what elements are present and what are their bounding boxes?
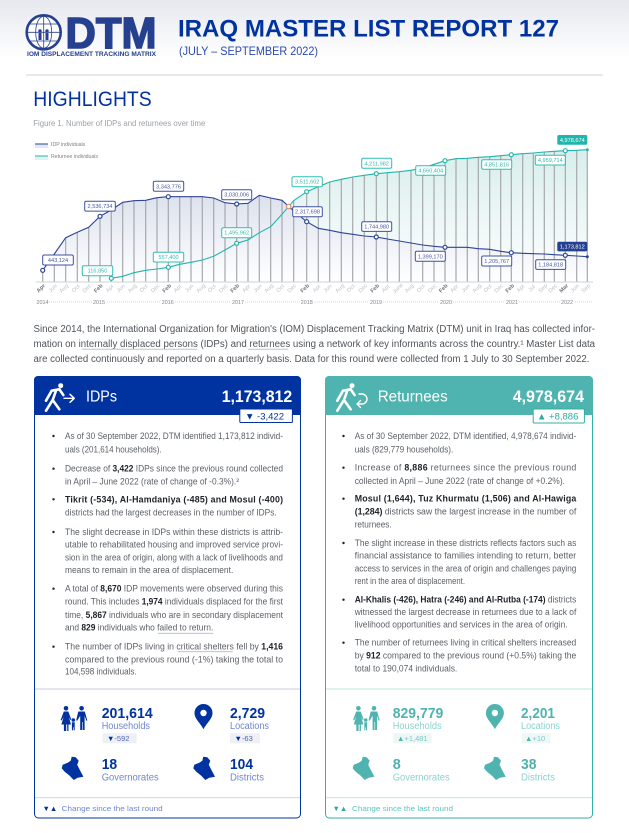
- x axis month labels: Dec: [287, 283, 298, 294]
- x axis month labels: Aug: [264, 283, 275, 294]
- stat: locations: ▲+10: [525, 734, 545, 743]
- panel header: IDPs: [34, 376, 301, 422]
- x axis month labels: Dec: [218, 283, 230, 294]
- stat: districts: Districts: [521, 773, 555, 784]
- DTM wordmark: DTM: [66, 9, 156, 58]
- bullet: reasons: [52, 527, 283, 575]
- IDP bullet list: [52, 431, 284, 676]
- x axis years: 2016: [162, 300, 174, 306]
- heading: highlights: HIGHLIGHTS: [33, 88, 152, 111]
- bullet: largest decreases: [342, 595, 577, 630]
- x axis month labels: Oct: [416, 283, 427, 294]
- bullet: largest decreases: [52, 494, 283, 518]
- x axis month labels: Feb: [162, 283, 173, 294]
- bullet: increase: Increase of 8,886 returnees since the previous round: [355, 463, 576, 473]
- bullet: identified IDPs: [52, 431, 283, 455]
- x axis years: 2015: [93, 300, 105, 306]
- x axis month labels: Aug: [127, 283, 138, 294]
- callouts: returnee values: 116,850: [88, 269, 107, 275]
- stat: locations: 2,729: [230, 705, 265, 722]
- x axis years: 2021: [506, 300, 518, 306]
- stat: households: 829,779: [393, 705, 443, 722]
- bullet: reasons: access to services in the area of origin and challenges paying: [355, 563, 576, 573]
- callouts: returnee values: [82, 135, 587, 276]
- subtitle: period: (JULY – SEPTEMBER 2022): [179, 44, 318, 58]
- icon: IOM globe: [27, 15, 61, 49]
- x axis month labels: Sep: [581, 283, 592, 294]
- x axis month labels: Feb: [230, 283, 241, 294]
- icon: family: [353, 706, 380, 731]
- x axis month labels: Oct: [346, 283, 357, 294]
- label: IDPs: IDPs: [86, 389, 117, 406]
- x axis month labels: Apr: [381, 284, 392, 294]
- stat: households: [353, 705, 443, 743]
- icon: person moving with arrow: [46, 383, 74, 411]
- bullet: identified returnees: [342, 431, 576, 455]
- bullet: identified returnees: As of 30 September 2022, DTM identified, 4,978,674 individ-: [355, 431, 576, 441]
- x axis month labels: Dec: [150, 283, 162, 294]
- stat: households: ▲+1,481: [397, 734, 428, 743]
- bullet: reasons: [342, 538, 577, 586]
- stat: governorates: 8: [393, 756, 401, 773]
- bullet: reasons: means to remain in the area of displacement.: [65, 565, 233, 575]
- panel header: returnees: [325, 376, 593, 423]
- x axis month labels: Jun: [116, 283, 127, 294]
- bullet: identified returnees: uals (829,779 households).: [355, 445, 453, 455]
- x axis years: [36, 298, 593, 306]
- returnee line: [111, 150, 587, 278]
- bullet: critical shelters: compared to the previous round (-1%) taking the total to: [65, 654, 283, 664]
- callouts: IDP values: 443,124: [48, 258, 68, 264]
- callouts: IDP values: 1,173,812: [560, 245, 585, 251]
- icon: family: [61, 706, 87, 731]
- stat: districts: 104: [230, 756, 254, 773]
- x axis month labels: Aug: [472, 283, 483, 294]
- icon: map of Iraq: [353, 757, 374, 780]
- callouts: IDP values: [43, 181, 587, 269]
- callouts: IDP values: 2,536,734: [88, 204, 112, 210]
- bullet: movements: A total of 8,670 IDP movements were observed during this: [65, 584, 284, 594]
- bullet: movements: and 829 individuals who failed to return.: [65, 623, 213, 633]
- bullet: largest increases: Mosul (1,644), Tuz Khurmatu (1,506) and Al-Hawiga: [355, 494, 576, 504]
- x axis month labels: Jul: [528, 284, 537, 293]
- bullet: largest increases: [342, 494, 577, 530]
- x axis years: 2017: [232, 300, 244, 306]
- callouts: returnee values: 4,959,714: [538, 158, 563, 164]
- x axis month labels: Oct: [483, 283, 494, 294]
- x axis month labels: Aug: [59, 283, 70, 294]
- bullet: largest increases: (1,284) districts saw the largest increase in the number of: [355, 507, 577, 517]
- stat: households: ▼-592: [107, 734, 129, 743]
- returnee area: [111, 150, 587, 282]
- stat: districts: Districts: [230, 773, 264, 784]
- stat: households: Households: [393, 721, 442, 732]
- badge: returnee change: ▲ +8,886: [537, 412, 578, 422]
- bullet: reasons: financial assistance to families intending to return, better: [355, 550, 576, 560]
- x axis month labels: Dec: [427, 283, 439, 294]
- stat: districts: 38: [521, 756, 536, 773]
- x axis month labels: Oct: [139, 283, 150, 294]
- badge: returnee change: [533, 409, 584, 423]
- bullet: decrease: [52, 464, 283, 487]
- bullet: identified IDPs: uals (201,614 households).: [65, 445, 162, 455]
- stat: locations: Locations: [521, 721, 560, 732]
- x axis month labels: Apr: [516, 284, 527, 294]
- IDP line: [43, 195, 587, 270]
- x axis month labels: Mar: [559, 283, 571, 294]
- bullet: decrease: in April – June 2022 (rate of change of -0.3%).²: [65, 477, 239, 487]
- legend: change since last round: Change since the last round: [352, 804, 453, 813]
- IDP area: [43, 195, 587, 282]
- chart legend: Returnee individuals: [51, 154, 98, 160]
- bullet: decrease: Decrease of 3,422 IDPs since the previous round collected: [65, 464, 283, 474]
- stat: governorates: Governorates: [102, 773, 159, 784]
- x axis month labels: Oct: [207, 283, 218, 294]
- x axis month labels: [36, 282, 592, 295]
- x axis month labels: Aug: [404, 283, 415, 294]
- x axis month labels: Feb: [505, 283, 516, 294]
- callouts: returnee values: 3,511,602: [295, 180, 319, 186]
- legend: change since last round: ▼▲: [332, 804, 347, 813]
- bullet: identified IDPs: As of 30 September 2022, DTM identified 1,173,812 individ-: [65, 431, 283, 441]
- x axis month labels: Feb: [300, 283, 311, 294]
- callouts: returnee values: 557,400: [158, 255, 179, 261]
- x axis month labels: Apr: [105, 284, 116, 294]
- x axis month labels: Feb: [438, 283, 450, 294]
- x axis month labels: Dec: [494, 283, 505, 294]
- intro paragraph: are collected continuously and reported on a quarterly basis. Data for this round were collected from 1 July to 30 September 2022.: [34, 354, 590, 365]
- x axis month labels: Dec: [82, 283, 93, 294]
- bullet: largest increases: returnees.: [355, 520, 392, 530]
- legend: change since last round: Change since the last round: [62, 804, 163, 813]
- x axis years: 2014: [36, 300, 48, 306]
- stat: governorates: [62, 756, 159, 784]
- stat: locations: [194, 704, 269, 743]
- line chart: IDPs and returnees over time: [35, 135, 593, 306]
- x axis month labels: Aug: [196, 283, 207, 294]
- x axis years: 2018: [301, 300, 313, 306]
- icon: location pin: [194, 704, 212, 729]
- intro paragraph: Since 2014, the International Organization for Migration's (IOM) Displacement Tracking Matrix (DTM) unit in Iraq has collected infor-: [34, 324, 595, 335]
- x axis month labels: Sep: [538, 283, 549, 294]
- bullet: reasons: rent in the area of displacement.: [355, 576, 465, 586]
- chart legend: IDP individuals: [51, 142, 86, 148]
- x axis month labels: Jun: [461, 283, 472, 294]
- callouts: returnee values: 4,978,674: [560, 138, 585, 144]
- x axis month labels: Apr: [173, 284, 184, 294]
- x axis month labels: Jun: [48, 283, 59, 294]
- bullet: movements: [52, 584, 284, 633]
- x axis month labels: Oct: [71, 283, 82, 294]
- stat: locations: ▼-63: [234, 734, 253, 743]
- icon: map of Iraq: [484, 757, 506, 780]
- bullet: movements: time, 5,867 individuals who are in secondary displacement: [65, 610, 284, 620]
- x axis month labels: Apr: [312, 284, 323, 294]
- bullet: critical shelters: 104,598 individuals.: [65, 666, 137, 676]
- bullet: reasons: The slight decrease in IDPs within these districts is attrib-: [65, 527, 283, 537]
- data markers: [41, 148, 589, 280]
- panel: IDPs: [34, 376, 301, 818]
- x axis month labels: Jun: [253, 283, 264, 294]
- bullet: reasons: The slight increase in these districts reflects factors such as: [355, 538, 577, 548]
- stat: locations: 2,201: [521, 705, 555, 722]
- x axis years: 2022: [561, 300, 573, 306]
- callouts: IDP values: 1,184,818: [538, 263, 563, 269]
- figure caption: Figure 1. Number of IDPs and returnees over time: [33, 119, 206, 128]
- logo: IOM DTM: [27, 9, 157, 58]
- callouts: IDP values: 3,030,006: [224, 193, 249, 199]
- x axis month labels: Apr: [36, 283, 47, 294]
- stat: households: [61, 705, 153, 743]
- x axis month labels: Apr: [450, 284, 460, 294]
- stat: locations: [486, 704, 560, 743]
- bullet: critical shelters: The number of IDPs living in critical shelters fell by 1,416: [65, 642, 283, 652]
- callouts: IDP values: 2,317,698: [295, 210, 320, 216]
- panel: returnees: [325, 376, 593, 818]
- x axis month labels: Aug: [335, 283, 346, 294]
- bullet: critical shelters: by 912 compared to the previous round (+0.5%) taking the: [355, 651, 576, 661]
- bullet: largest decreases: districts had the largest decreases in the number of IDPs.: [65, 508, 277, 518]
- callouts: returnee values: 4,211,982: [364, 161, 389, 167]
- bullet: critical shelters: total to 190,074 individuals.: [355, 663, 457, 673]
- x axis month labels: Feb: [93, 283, 105, 294]
- callouts: IDP values: 1,744,980: [364, 225, 389, 231]
- bullet: critical shelters: The number of returnees living in critical shelters increased: [355, 638, 576, 648]
- icon: person returning with arrow: [337, 383, 367, 411]
- callouts: returnee values: 4,660,404: [418, 169, 443, 175]
- total: returnees: 4,978,674: [513, 388, 585, 406]
- icon: map of Iraq: [62, 757, 83, 780]
- icon: location pin: [486, 704, 504, 729]
- x axis years: 2020: [440, 300, 452, 306]
- chart legend: [35, 142, 98, 160]
- callouts: IDP values: 1,205,767: [484, 259, 509, 265]
- icon: map of Iraq: [193, 757, 215, 780]
- bullet: reasons: sion in the area of origin, along with a lack of livelihoods and: [65, 553, 283, 563]
- x axis years: 2019: [370, 300, 382, 306]
- x axis month labels: Jun: [184, 283, 195, 294]
- stat: governorates: Governorates: [393, 773, 450, 784]
- x axis month labels: June: [392, 282, 405, 295]
- stat: governorates: [353, 756, 450, 784]
- intro paragraph: mation on internally displaced persons (IDPs) and returnees using a network of key informants across the country.¹ Master List data: [34, 339, 595, 350]
- x axis month labels: Jun: [570, 283, 581, 294]
- bullet: critical shelters: [342, 638, 576, 673]
- legend: change since last round: ▼▲: [42, 804, 57, 813]
- x axis month labels: Feb: [370, 283, 381, 294]
- bullet: reasons: utable to rehabilitated housing and improved service provi-: [65, 540, 283, 550]
- badge: IDP change: ▼ -3,422: [245, 411, 284, 422]
- bullet: largest decreases: Tikrit (-534), Al-Hamdaniya (-485) and Mosul (-400): [65, 494, 283, 504]
- callouts: IDP values: 1,399,170: [418, 254, 443, 260]
- x axis month labels: Oct: [276, 283, 286, 294]
- callouts: IDP values: 3,343,776: [156, 184, 181, 190]
- stat: households: 201,614: [102, 705, 153, 722]
- bullet: largest decreases: witnessed the largest decrease in returnees due to a lack of: [354, 607, 577, 617]
- bullet: largest decreases: Al-Khalis (-426), Hatra (-246) and Al-Rutba (-174) districts: [355, 595, 577, 605]
- label: returnees: Returnees: [378, 389, 448, 406]
- badge: IDP change: [240, 409, 292, 422]
- bullet: increase: [342, 463, 576, 486]
- bullet: critical shelters: [52, 642, 283, 676]
- x axis month labels: Apr: [242, 284, 252, 294]
- returnee bullet list: [342, 431, 577, 673]
- stat: governorates: 18: [102, 756, 117, 773]
- logo caption: IOM DISPLACEMENT TRACKING MATRIX: [27, 52, 156, 58]
- callouts: returnee values: 4,851,816: [484, 163, 509, 169]
- intro paragraph: [34, 324, 595, 365]
- stat: locations: Locations: [230, 721, 269, 732]
- bullet: largest decreases: livelihood opportunities and services in the area of origin.: [355, 620, 568, 630]
- x axis month labels: Jun: [323, 283, 334, 294]
- total: IDPs: 1,173,812: [222, 388, 292, 406]
- bullet: increase: collected in April – June 2022 (rate of change of +0.2%).: [355, 476, 565, 486]
- stat: households: Households: [102, 721, 150, 732]
- x axis month labels: Dec: [548, 283, 559, 294]
- stat: districts: [484, 756, 555, 784]
- title: IRAQ MASTER LIST REPORT 127: [178, 16, 559, 43]
- bullet: movements: round. This includes 1,974 individuals displaced for the first: [65, 597, 284, 607]
- x axis month labels: Dec: [358, 283, 369, 294]
- stat: districts: [193, 756, 264, 784]
- callouts: returnee values: 1,495,962: [224, 231, 249, 237]
